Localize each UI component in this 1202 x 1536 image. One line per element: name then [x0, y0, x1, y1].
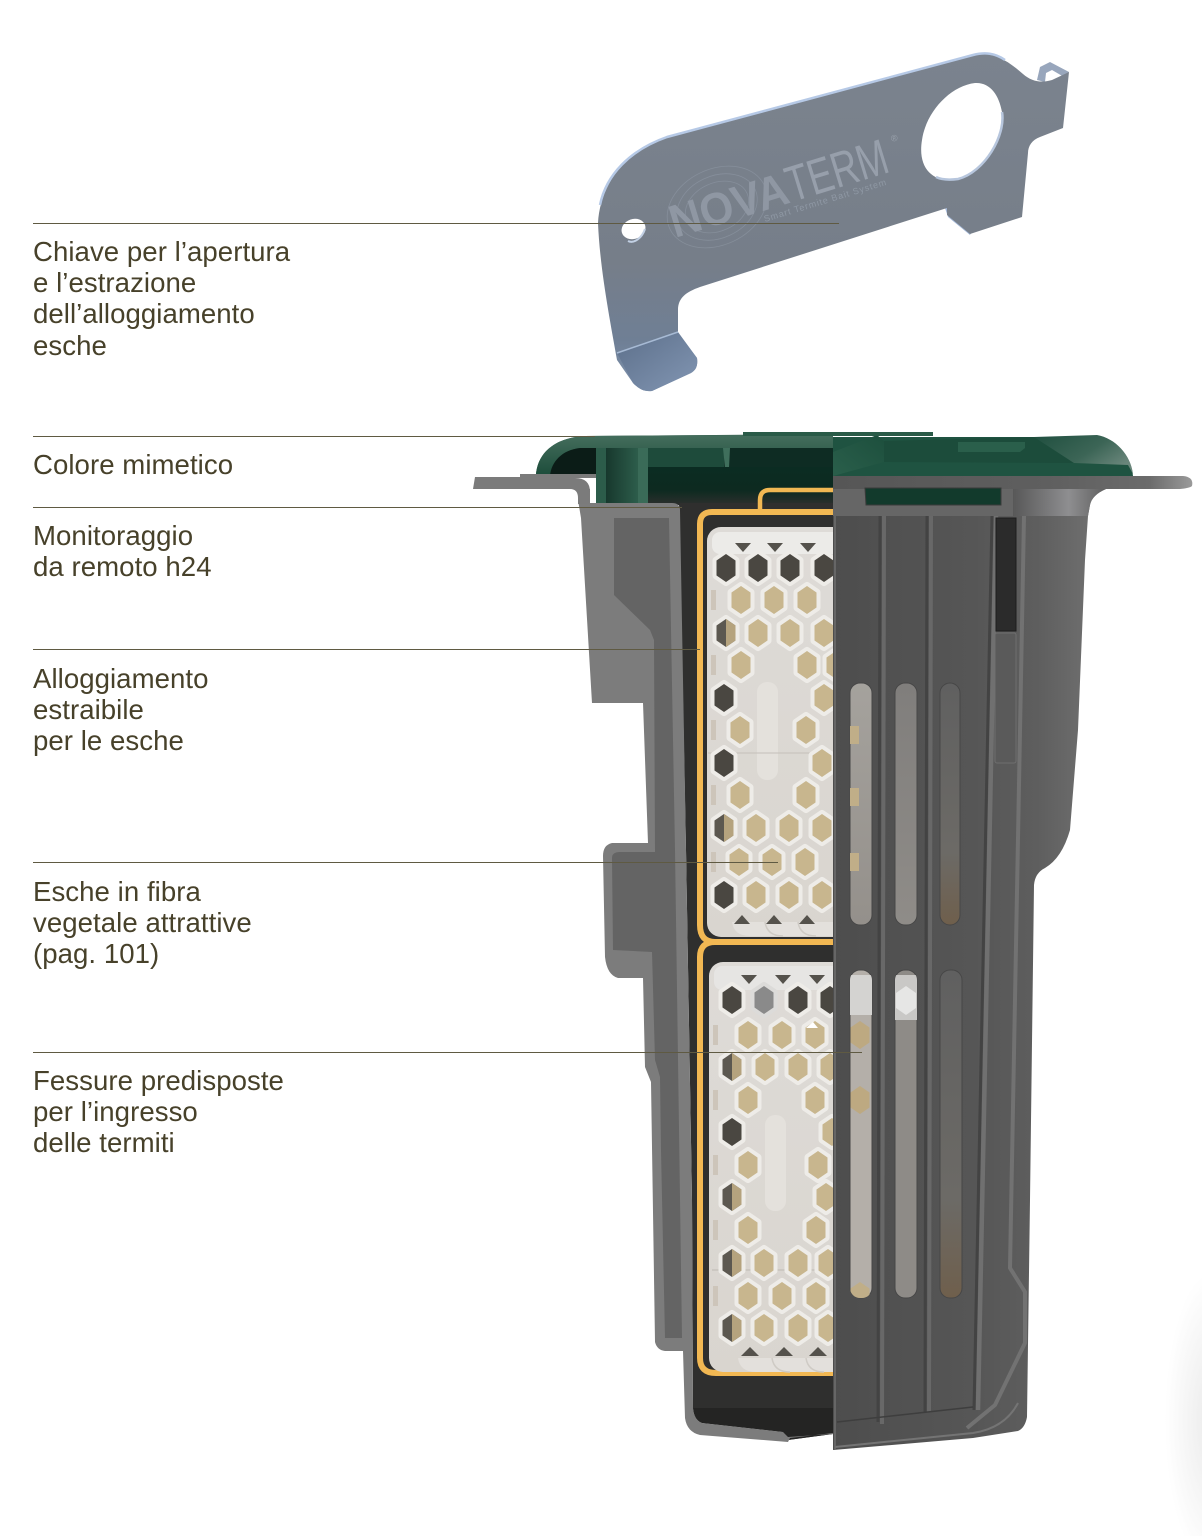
card left cell hints	[711, 590, 716, 872]
exterior right half	[743, 432, 1192, 1450]
hex holes lower	[722, 986, 742, 1014]
triangles upper	[734, 543, 816, 924]
cap exterior	[743, 432, 1133, 476]
label: baits	[33, 876, 252, 969]
label: key: dell’alloggiamento	[33, 298, 255, 329]
label: slots: delle termiti	[33, 1127, 175, 1158]
label: monitoring	[33, 520, 212, 582]
outer shell wall	[578, 489, 833, 1442]
body exterior	[833, 516, 1088, 1450]
key with Novaterm logo	[598, 53, 1069, 391]
rib lower	[765, 1115, 786, 1211]
bait card lower	[709, 962, 850, 1372]
label: colour: Colore mimetico	[33, 449, 233, 480]
label: removable housing: Alloggiamento	[33, 663, 209, 694]
label: key: esche	[33, 330, 107, 361]
label: monitoring: Monitoraggio	[33, 520, 193, 551]
label: baits: Esche in fibra	[33, 876, 201, 907]
logo wordmark: NOVA	[663, 162, 795, 248]
ribs	[835, 516, 1025, 1449]
cavity	[679, 503, 833, 1440]
right flange	[833, 476, 1192, 489]
slot in collar	[865, 488, 1001, 505]
key notch tab	[945, 201, 975, 235]
collar	[833, 489, 1106, 516]
card lobes upper	[732, 922, 850, 936]
rib	[757, 682, 778, 780]
logo wordmark	[663, 129, 899, 248]
key hook right	[1037, 62, 1069, 82]
label: key	[33, 236, 290, 361]
label: baits: (pag. 101)	[33, 938, 159, 969]
flange left	[473, 474, 596, 504]
key highlights	[600, 53, 1005, 205]
card left cell hints	[713, 1025, 718, 1306]
slots	[850, 683, 962, 1298]
hex holes upper	[716, 554, 736, 582]
logo wordmark: Smart Termite Bait System	[763, 177, 888, 224]
key body	[598, 54, 1069, 391]
inner shell shading	[612, 518, 682, 1338]
triangles lower	[741, 975, 827, 1356]
label: slots: Fessure predisposte	[33, 1065, 284, 1096]
leader lines	[33, 224, 862, 1052]
label: key: e l’estrazione	[33, 267, 196, 298]
bait seen through slots	[850, 726, 917, 1310]
label: baits: vegetale attrattive	[33, 907, 252, 938]
label: removable housing: per le esche	[33, 725, 184, 756]
sensor window	[996, 518, 1016, 631]
panel below window	[995, 633, 1016, 763]
cutaway left half	[473, 432, 850, 1442]
label: key: Chiave per l’apertura	[33, 236, 290, 267]
top row lattice	[712, 532, 842, 554]
label: slots: per l’ingresso	[33, 1096, 198, 1127]
logo rings	[654, 151, 780, 263]
logo wordmark: ®	[890, 132, 899, 144]
yellow housing frame	[700, 490, 836, 1373]
cap section	[536, 432, 833, 505]
label: monitoring: da remoto h24	[33, 551, 212, 582]
key fold tab	[617, 332, 697, 391]
logo wordmark: TERM	[779, 129, 895, 213]
label: removable housing	[33, 663, 209, 756]
faint edge shadow	[1165, 1270, 1202, 1536]
bait card upper	[707, 527, 850, 937]
label: removable housing: estraibile	[33, 694, 144, 725]
label: slots	[33, 1065, 284, 1158]
